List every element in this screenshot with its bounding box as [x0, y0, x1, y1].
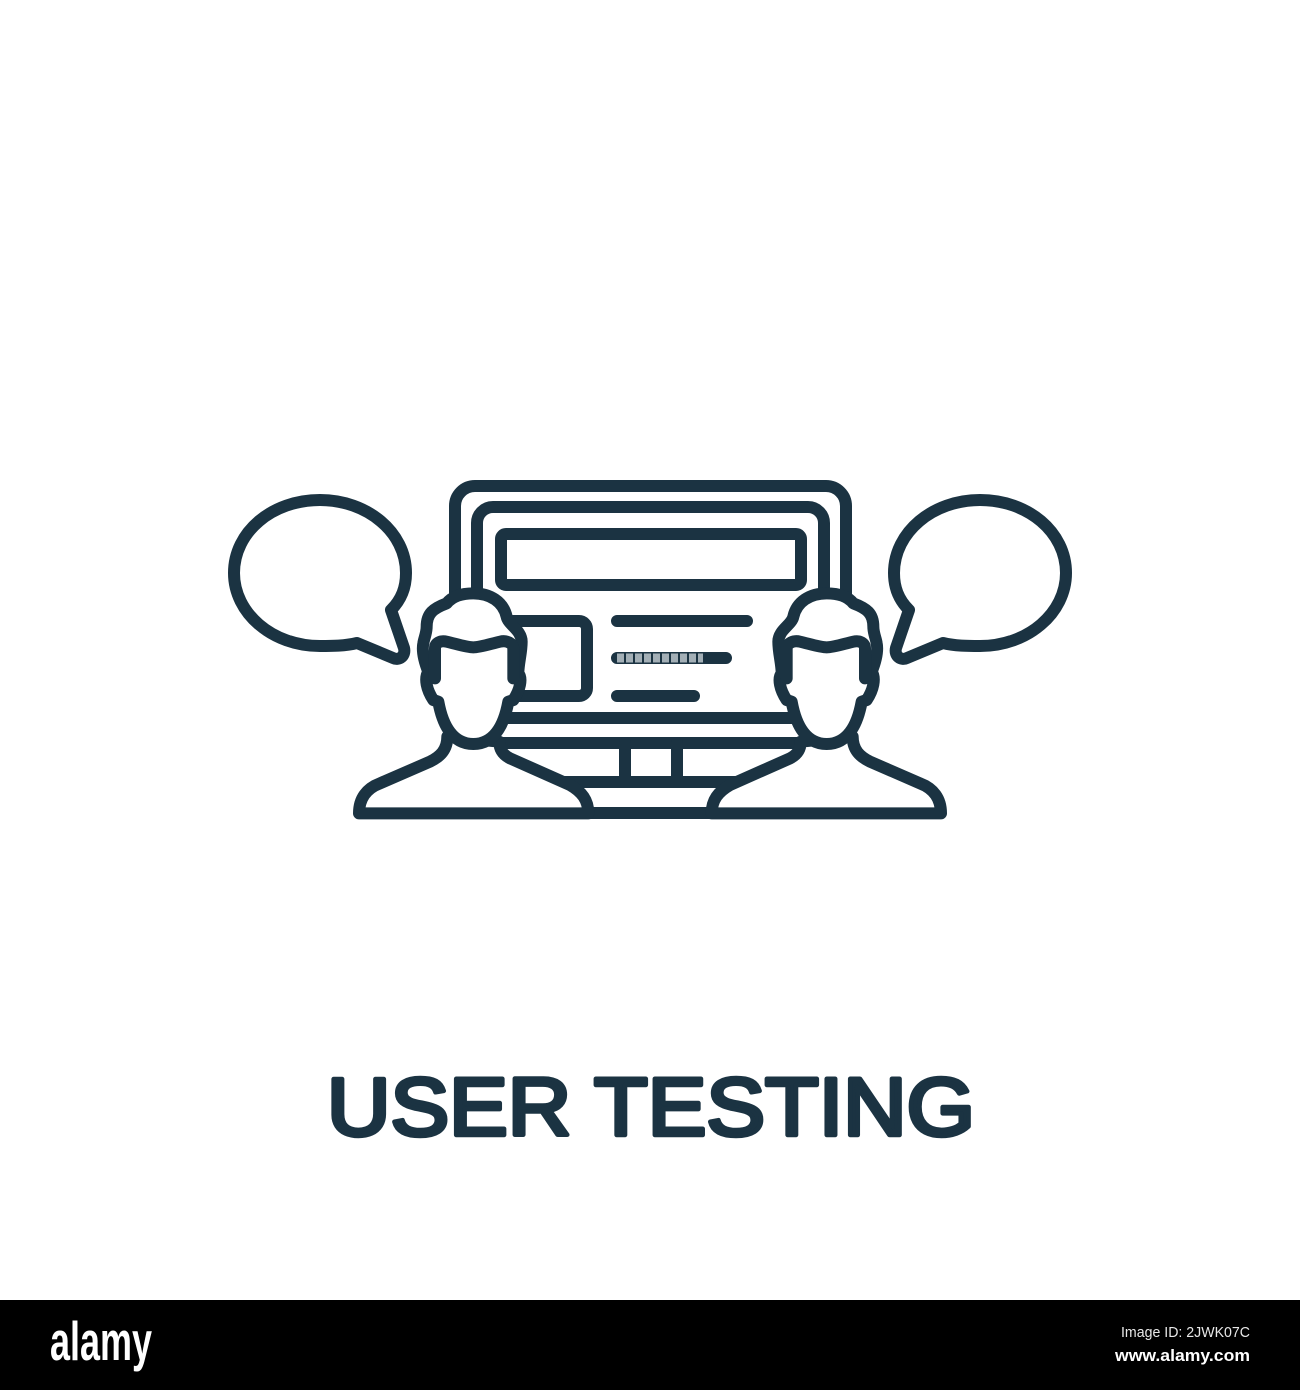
left person head	[423, 593, 522, 744]
right person shoulders	[712, 737, 941, 813]
right person	[712, 593, 941, 813]
footer background	[0, 1300, 1300, 1390]
alamy logo: alamy	[50, 1310, 152, 1372]
website: www.alamy.com	[1114, 1346, 1250, 1365]
icon: user testing	[234, 486, 1066, 813]
left person shoulders	[359, 737, 588, 813]
footer bar	[0, 1300, 1300, 1390]
title: USER TESTING	[327, 1062, 975, 1153]
left person hairline and sideburns	[435, 641, 513, 678]
watermark on text line	[617, 654, 703, 662]
left speech bubble	[234, 500, 406, 659]
icon: computer monitor	[455, 486, 846, 813]
right speech bubble	[894, 500, 1066, 659]
text lines	[617, 621, 747, 696]
monitor outer frame	[455, 486, 846, 743]
right person hairline and sideburns	[787, 641, 865, 678]
image placeholder	[505, 621, 587, 696]
header bar	[501, 534, 801, 585]
left person	[359, 593, 588, 813]
monitor screen	[477, 507, 824, 718]
image id: Image ID: 2JWK07C	[1121, 1324, 1250, 1341]
right person head	[778, 593, 877, 744]
monitor stand	[560, 743, 740, 813]
